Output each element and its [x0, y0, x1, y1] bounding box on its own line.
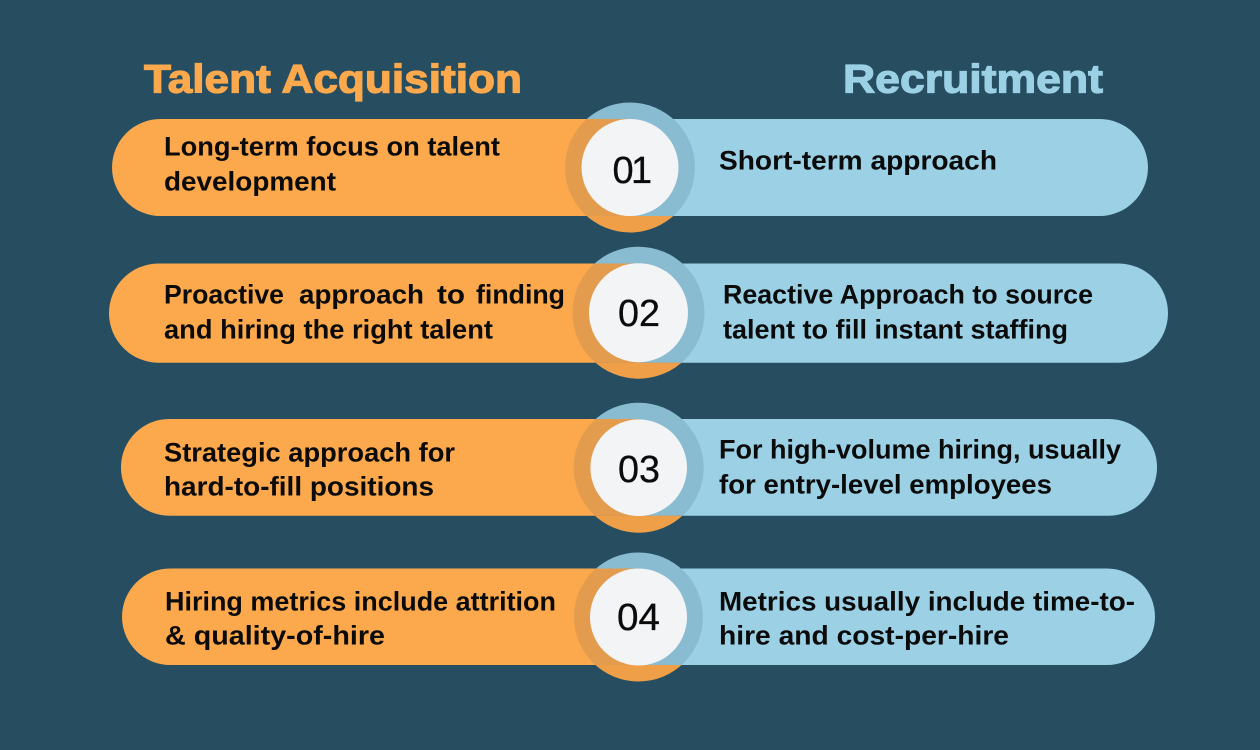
right pill: row 3	[639, 419, 1157, 516]
number: 02: 02	[618, 293, 660, 335]
number badge: 03	[590, 419, 687, 516]
left text: row 4	[165, 586, 556, 650]
right text: row 2	[723, 280, 1093, 344]
left pill: row 1	[112, 119, 630, 216]
left text: row 4: Hiring metrics include attrition	[165, 586, 556, 616]
number: 01: 01	[612, 150, 652, 192]
ring: row 3	[574, 402, 704, 533]
right text: row 3	[719, 434, 1121, 500]
left text: row 1	[164, 132, 500, 196]
row 2	[109, 240, 1168, 385]
number badge: 01	[582, 119, 678, 216]
left text: row 2: finding	[476, 280, 565, 310]
left text: row 1: Long-term focus on talent	[164, 132, 500, 162]
right text: row 4: hire and cost-per-hire	[719, 620, 1009, 650]
heading: Recruitment: Recruitment	[843, 58, 1103, 102]
left text: row 2	[164, 280, 565, 344]
left pill: row 3	[121, 419, 639, 516]
left text: row 2: to	[437, 280, 465, 310]
left text: row 2: Proactive	[164, 280, 284, 310]
number: 04: 04	[617, 597, 660, 639]
left text: row 4: & quality-of-hire	[165, 620, 385, 650]
left text: row 2: and hiring the right talent	[164, 314, 493, 344]
left text: row 3	[164, 438, 455, 502]
right pill: row 4	[638, 568, 1155, 665]
ring: row 4	[574, 552, 703, 682]
left pill: row 2	[109, 264, 638, 363]
left text: row 2: approach	[299, 280, 424, 310]
right text: row 4: Metrics usually include time-to-	[719, 586, 1135, 616]
left text: row 3: hard-to-fill positions	[164, 472, 434, 502]
right pill: row 2	[638, 264, 1168, 363]
right text: row 2: Reactive Approach to source	[723, 280, 1093, 310]
row 1	[112, 100, 1148, 236]
left pill: row 4	[122, 568, 638, 665]
left text: row 3: Strategic approach for	[164, 438, 455, 468]
right text: row 3: For high-volume hiring, usually	[719, 434, 1121, 464]
number badge: 02	[589, 263, 688, 362]
right pill: row 1	[630, 119, 1148, 216]
heading: Talent Acquisition: Talent Acquisition	[144, 58, 522, 102]
ring: row 2	[572, 246, 704, 379]
number badge: 04	[590, 568, 687, 666]
number: 03: 03	[618, 449, 660, 491]
right text: row 4	[719, 586, 1135, 650]
row 3	[121, 395, 1157, 538]
right text: row 2: talent to fill instant staffing	[723, 314, 1068, 344]
row 4	[122, 545, 1155, 687]
ring: row 1	[565, 102, 695, 232]
right text: row 3: for entry-level employees	[719, 470, 1052, 500]
right text: row 1: Short-term approach	[719, 146, 997, 176]
left text: row 1: development	[164, 166, 336, 196]
